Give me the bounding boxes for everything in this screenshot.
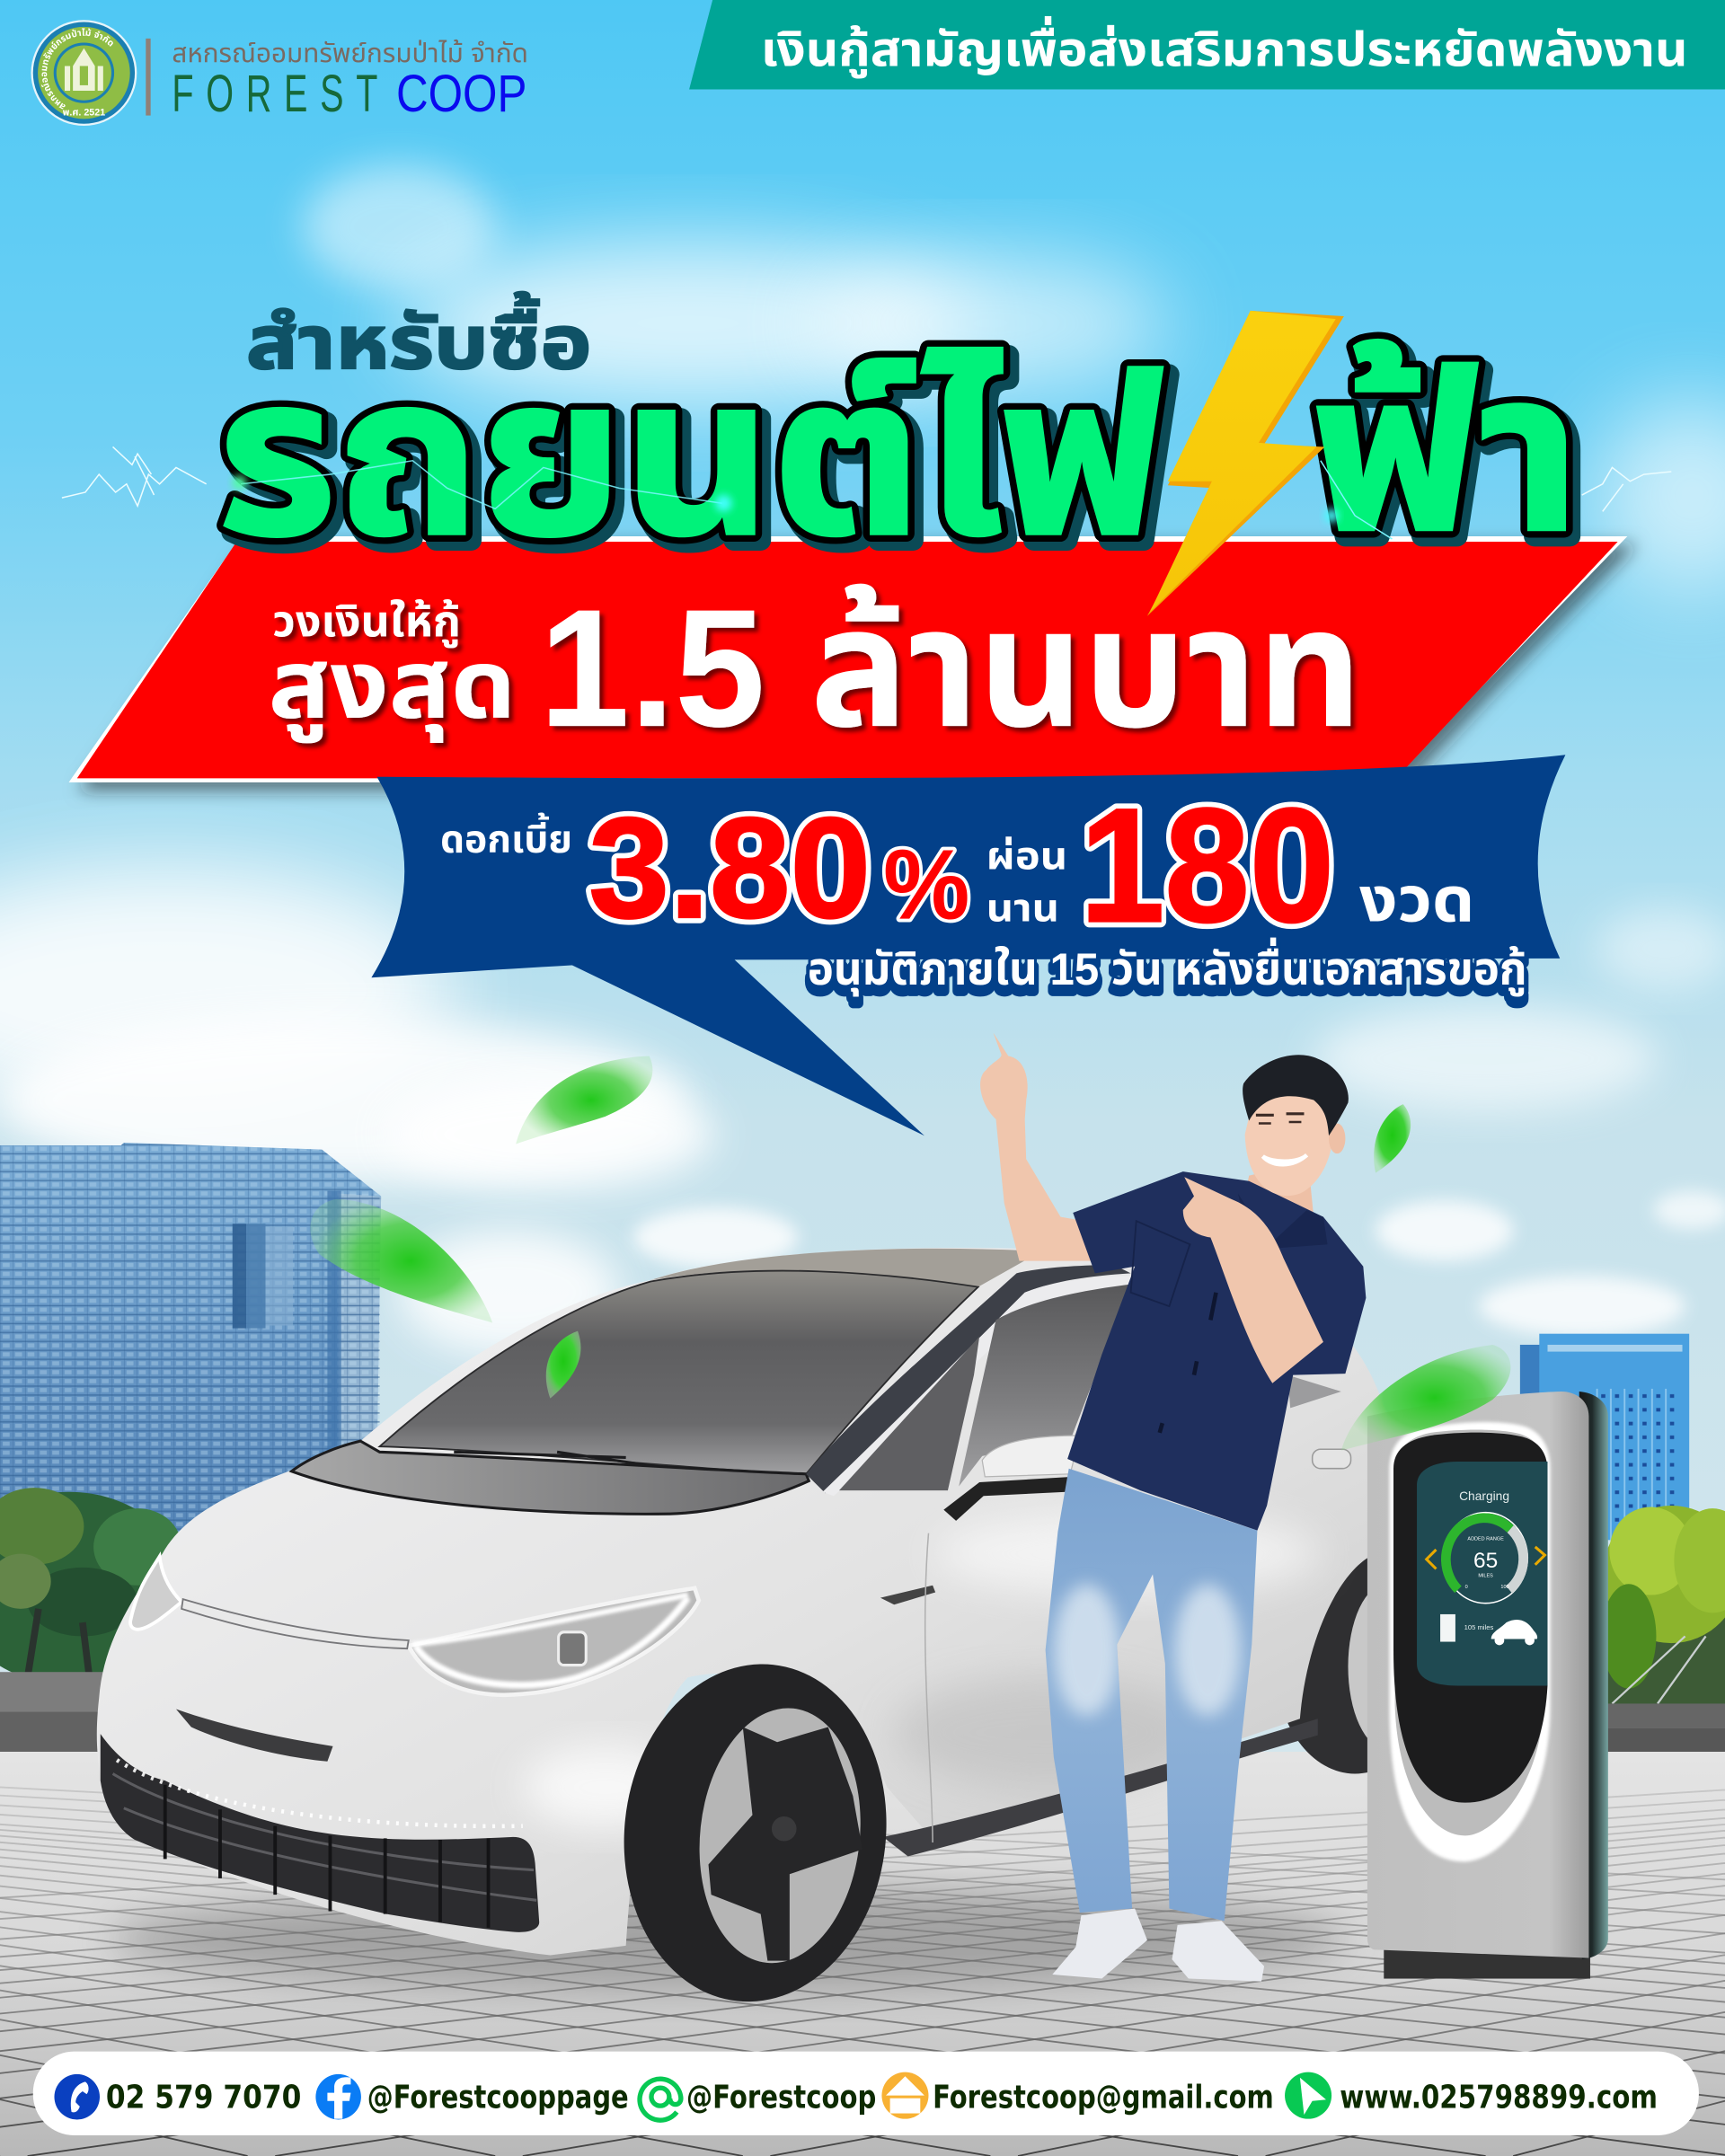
icon: lightning bolt <box>1147 311 1344 616</box>
text: interest and term: 180 <box>1080 775 1334 957</box>
wipers <box>454 1452 709 1474</box>
neck <box>1238 1162 1314 1251</box>
charger side <box>1579 1392 1608 1959</box>
charger body <box>1367 1392 1588 1958</box>
heading: electric car: ฟ้า <box>1311 328 1580 577</box>
building: left office tower <box>0 1143 381 1533</box>
icon: web <box>1285 2072 1331 2119</box>
clouds <box>0 165 1725 1355</box>
leaf: right of face <box>1374 1104 1411 1173</box>
logo: seal: พ.ศ. 2521 <box>63 108 105 119</box>
grille strip <box>181 1599 409 1648</box>
text: credit limit: สูงสุด <box>269 631 516 743</box>
logo: wordmark <box>172 40 528 123</box>
door handles <box>880 1449 1351 1604</box>
person <box>980 1032 1366 1982</box>
roof band <box>650 1249 1041 1287</box>
range label: 105 miles <box>1464 1623 1493 1631</box>
gauge: 100 <box>1500 1585 1509 1590</box>
logo: wordmark: สหกรณ์ออมทรัพย์กรมป่าไม้ จำกัด <box>172 40 528 68</box>
gauge: 65 <box>1473 1549 1498 1573</box>
door seam <box>925 1533 933 1842</box>
building: right blue tower <box>1520 1334 1689 1540</box>
car shadow <box>110 1886 1348 1991</box>
head <box>1243 1055 1349 1196</box>
text: interest and term: 3.80 <box>588 788 871 948</box>
ground: paving <box>0 1752 1725 2156</box>
raised arm <box>980 1032 1101 1261</box>
heading: electric car: ฟ้า <box>1316 335 1586 584</box>
gauge: ADDED RANGE <box>1467 1536 1504 1542</box>
speech bubble <box>371 755 1565 1135</box>
shirt <box>1067 1171 1366 1531</box>
gauge: 0 <box>1465 1585 1468 1590</box>
mirror <box>943 1436 1080 1521</box>
icon: facebook <box>315 2074 361 2119</box>
bumper grille <box>101 1734 539 1932</box>
cavity <box>1393 1433 1547 1803</box>
text: credit limit: วงเงินให้กู้ <box>272 598 461 649</box>
low wall <box>0 1672 1725 1752</box>
bent arm <box>1183 1177 1323 1383</box>
heading: electric car: ฟ้า <box>1311 328 1580 577</box>
charger <box>1367 1392 1608 1979</box>
text: interest and term: 180 <box>1080 775 1334 957</box>
trees <box>0 1488 1725 1705</box>
text: interest and term: งวด <box>1359 864 1474 935</box>
top banner: เงินกู้สามัญเพื่อส่งเสริมการประหยัดพลังงาน <box>761 15 1688 78</box>
text: credit limit: 1.5 ล้านบาท <box>539 574 1362 762</box>
contact bar <box>33 2052 1699 2135</box>
icon: line <box>640 2079 681 2120</box>
plate recess <box>176 1710 333 1762</box>
heading: electric car <box>217 328 1586 588</box>
charger base <box>1384 1949 1590 1979</box>
chevrons <box>1427 1547 1544 1568</box>
bumper dots <box>117 1760 523 1826</box>
car <box>97 1248 1435 2015</box>
car body <box>97 1248 1403 1956</box>
hood panel <box>292 1441 809 1514</box>
body reflections <box>523 1513 1321 1829</box>
rocker sill <box>883 1719 1318 1856</box>
line handle: @Forestcoop <box>686 2079 876 2116</box>
front wheel <box>607 1651 903 2015</box>
website: www.025798899.com <box>1340 2079 1658 2116</box>
jeans <box>1046 1469 1257 1921</box>
heading: for buying: สำหรับซื้อ <box>246 291 591 384</box>
text: interest and term: % <box>883 829 969 940</box>
text: interest and term: ผ่อน <box>986 835 1067 878</box>
logo: wordmark: COOP <box>396 65 526 123</box>
leaf: over charger <box>1341 1345 1510 1451</box>
logo: wordmark: FOREST <box>172 64 377 123</box>
heading: electric car: รถยนต์ไฟ <box>225 340 1171 588</box>
car icon <box>1491 1620 1537 1645</box>
red banner <box>69 536 1627 782</box>
left headlight <box>130 1557 181 1630</box>
electric sparks <box>62 446 1671 539</box>
facebook handle: @Forestcooppage <box>367 2079 629 2116</box>
heading: electric car: รถยนต์ไฟ <box>217 332 1163 581</box>
gauge: MILES <box>1478 1574 1493 1579</box>
phone number: 02 579 7070 <box>106 2079 301 2116</box>
icon: phone <box>54 2074 100 2119</box>
leaf: on windshield <box>546 1331 580 1399</box>
text: interest and term <box>440 775 1474 957</box>
gauge <box>1444 1513 1527 1604</box>
rear wheel <box>1275 1554 1435 1773</box>
logo: divider <box>146 39 151 116</box>
email: Forestcoop@gmail.com <box>933 2079 1274 2116</box>
screen label: Charging <box>1459 1489 1509 1503</box>
leaf: upper left of bubble tail <box>516 1056 652 1144</box>
logo: seal: สหกรณ์ออมทรัพย์กรมป่าไม้ จำกัด <box>41 28 113 110</box>
top banner <box>689 0 1725 89</box>
station icon <box>1440 1614 1455 1642</box>
shoes <box>1052 1908 1264 1982</box>
windshield <box>380 1271 978 1474</box>
text: interest and term: 3.80 <box>588 788 871 948</box>
text: approval time: อนุมัติภายใน 15 วัน หลังยื่นเอกสารขอกู้ <box>808 944 1527 1003</box>
light ring <box>1389 1422 1551 1861</box>
logo: seal <box>31 20 137 126</box>
side windows <box>839 1337 979 1490</box>
icon: mail <box>881 2072 928 2119</box>
text: interest and term: ดอกเบี้ย <box>440 812 572 862</box>
text: approval time: อนุมัติภายใน 15 วัน หลังยื่นเอกสารขอกู้ <box>808 937 1527 996</box>
text: interest and term: นาน <box>986 888 1059 931</box>
heading: electric car: รถยนต์ไฟ <box>217 332 1163 581</box>
leaf: over building <box>310 1199 492 1322</box>
screen <box>1417 1462 1547 1686</box>
A pillar <box>806 1265 1131 1493</box>
right headlight <box>409 1588 699 1695</box>
